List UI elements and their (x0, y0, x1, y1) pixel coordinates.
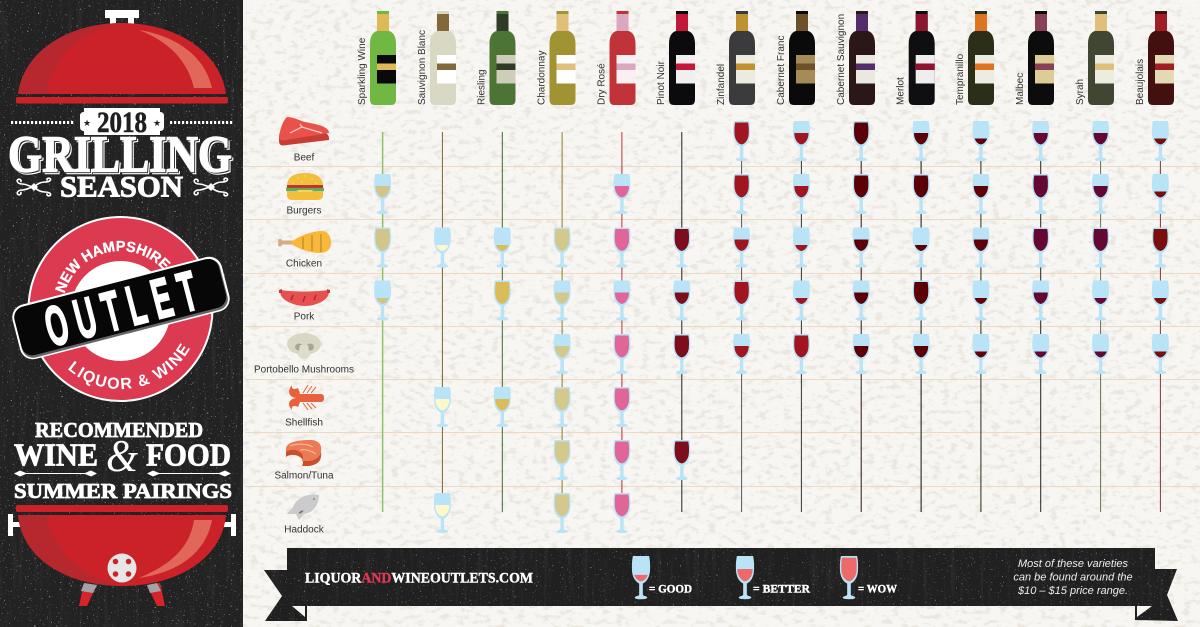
price note: Most of these varieties (1018, 558, 1129, 570)
price note (1013, 558, 1133, 597)
bottle: Malbec (1015, 11, 1054, 105)
title: grilling season: GRILLING (10, 128, 234, 186)
food row: pork (279, 289, 330, 322)
pairing column: Cabernet Sauvignon (853, 121, 870, 512)
heading: recommended wine and food summer pairings: RECOMMENDED (35, 418, 203, 442)
food row: salmon/tuna (274, 440, 334, 482)
heading: recommended wine and food summer pairings: & (106, 430, 138, 481)
legend: better (736, 556, 810, 599)
pairing column: Syrah (1092, 121, 1109, 512)
bottle: Sauvignon Blanc: Sauvignon Blanc (417, 30, 428, 105)
badge: 2018: 2018 (97, 106, 147, 139)
food row: shellfish (285, 385, 324, 428)
bottle: Riesling: Riesling (476, 69, 488, 105)
bottle: Tempranillo (955, 11, 994, 105)
bottle: Sparkling Wine: Sparkling Wine (357, 37, 368, 105)
icon: grill lid (16, 10, 228, 104)
bottle: Zinfandel: Zinfandel (716, 64, 727, 105)
bottle: Syrah: Syrah (1075, 79, 1086, 105)
pairing column: Malbec (1032, 121, 1049, 512)
bottle: Chardonnay (536, 11, 576, 105)
food row: portobello mushrooms (254, 333, 354, 376)
bottle: Pinot Noir: Pinot Noir (656, 60, 667, 105)
title: grilling season: GRILLING (8, 126, 232, 184)
icon: grill bowl (8, 505, 236, 606)
bottle: Beaujolais: Beaujolais (1135, 59, 1146, 105)
bottle: Dry Rosé (596, 11, 636, 105)
food row: portobello mushrooms: Portobello Mushrooms (254, 364, 354, 376)
pairing column: Sparkling Wine (374, 132, 391, 512)
left chalkboard panel (0, 0, 243, 627)
legend: better: = BETTER (753, 582, 810, 596)
badge: New Hampshire Outlet Liquor and Wine: OUTLET (39, 258, 212, 359)
heading: recommended wine and food summer pairings: FOOD (146, 436, 231, 472)
badge: 2018: ★ (83, 118, 91, 128)
pairing column: Zinfandel (733, 121, 750, 512)
bottle: Tempranillo: Tempranillo (955, 53, 966, 105)
pairing column: Dry Rosé (613, 132, 630, 533)
food row: salmon/tuna: Salmon/Tuna (274, 470, 334, 482)
bottle: Dry Rosé: Dry Rosé (596, 63, 608, 105)
food row: pork: Pork (294, 312, 315, 322)
bottle: Pinot Noir (656, 11, 695, 105)
pairing column: Riesling (494, 132, 511, 512)
heading: recommended wine and food summer pairings (14, 418, 232, 503)
legend: good: = GOOD (649, 582, 692, 596)
title: grilling season (8, 126, 234, 204)
food row: burgers: Burgers (286, 206, 322, 216)
food row: beef: Beef (294, 152, 315, 164)
pairing column: Sauvignon Blanc (434, 132, 451, 533)
bottle: Riesling (476, 11, 516, 105)
legend: wow (840, 556, 897, 599)
pairing column: Merlot (913, 121, 930, 512)
bottle: Merlot (896, 11, 935, 105)
heading: recommended wine and food summer pairings: WINE (14, 436, 98, 472)
bottle: Cabernet Sauvignon: Cabernet Sauvignon (836, 14, 847, 105)
bottle: Cabernet Franc: Cabernet Franc (776, 36, 787, 105)
heading: recommended wine and food summer pairings: SUMMER PAIRINGS (14, 479, 232, 503)
bottle: Syrah (1075, 11, 1114, 105)
bottle: Sauvignon Blanc (417, 11, 456, 105)
pairing column: Tempranillo (972, 121, 989, 512)
bottle: Sparkling Wine (357, 11, 396, 105)
bottle: Cabernet Sauvignon (836, 11, 875, 105)
badge: New Hampshire Outlet Liquor and Wine: NEW HAMPSHIRE (55, 240, 171, 293)
food row: beef (279, 117, 329, 164)
bottle: Chardonnay: Chardonnay (536, 51, 548, 105)
bottle: Zinfandel (716, 11, 755, 105)
food row: haddock: Haddock (284, 524, 325, 536)
badge: New Hampshire Outlet Liquor and Wine: LIQUOR & WINE (68, 343, 190, 390)
bottle: Cabernet Franc (776, 11, 815, 105)
legend: good (632, 556, 692, 599)
table row divider lines (245, 166, 1200, 486)
badge: 2018 (11, 106, 233, 139)
price note: $10 – $15 price range. (1017, 585, 1128, 597)
pairing column: Chardonnay (554, 132, 571, 533)
badge: New Hampshire Outlet Liquor and Wine (12, 216, 230, 402)
pairing column: Pinot Noir (673, 132, 690, 512)
bottle: Beaujolais (1135, 11, 1174, 105)
website url: LIQUORANDWINEOUTLETS.COM (305, 570, 533, 586)
food row: haddock (284, 494, 325, 536)
food row: shellfish: Shellfish (285, 418, 323, 428)
food row: burgers (286, 173, 324, 216)
food row: chicken (278, 231, 331, 270)
bottle: Merlot: Merlot (896, 77, 907, 105)
legend: wow: = WOW (858, 582, 897, 596)
food row: chicken: Chicken (286, 258, 322, 270)
badge: 2018: ★ (153, 118, 161, 128)
pairing column: Cabernet Franc (793, 121, 810, 512)
price note: can be found around the (1013, 572, 1133, 584)
title: grilling season: SEASON (60, 170, 183, 204)
legend ribbon (260, 545, 1180, 625)
bottle: Malbec: Malbec (1015, 73, 1026, 105)
pairing column: Beaujolais (1152, 121, 1169, 512)
title: grilling season: GRILLING (9, 128, 233, 184)
